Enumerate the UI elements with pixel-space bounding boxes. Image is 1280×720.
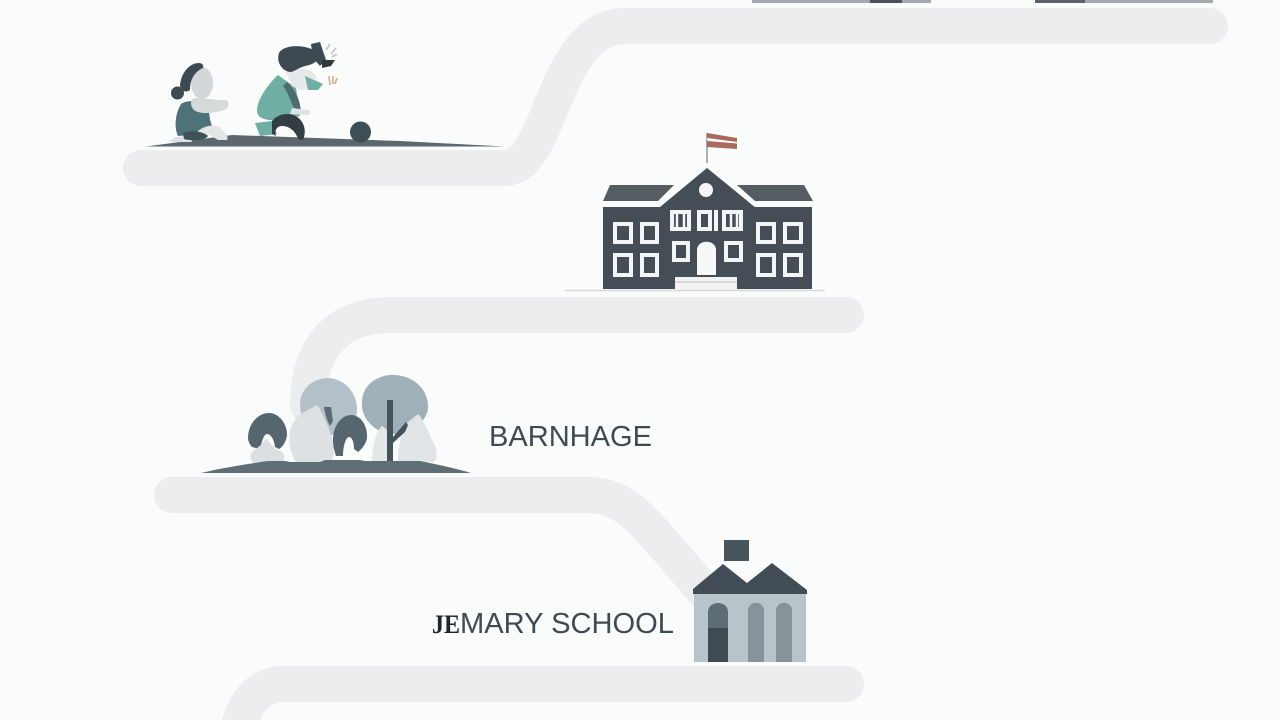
windows [615, 212, 801, 275]
gable round window [699, 183, 713, 197]
gable trim [659, 165, 755, 205]
cropped buildings at top edge [752, 0, 1213, 3]
path segment 1 [141, 26, 1210, 168]
illustration: trees [201, 375, 471, 473]
window mullions [677, 212, 737, 229]
left dark tree [248, 413, 287, 449]
label: Mary School: MARY SCHOOL [460, 608, 674, 640]
kneeling child [255, 42, 337, 140]
roof [693, 563, 807, 594]
roofs [603, 185, 674, 201]
path segment 2 [308, 315, 846, 405]
base line [565, 290, 825, 292]
label: Mary School: JE [432, 610, 460, 639]
center dark tree [333, 415, 367, 456]
pale foreground bushes [289, 405, 334, 462]
arched door [708, 603, 728, 662]
facade [694, 594, 806, 662]
seated child [168, 63, 228, 142]
path segment 4 [238, 684, 846, 720]
right tree canopy [362, 375, 428, 436]
faded back tree [300, 378, 357, 435]
ground under children [146, 135, 505, 146]
small dark trunk accent [324, 407, 333, 426]
chimney block [724, 540, 749, 561]
illustration: school building with flag [565, 133, 825, 290]
ground mound [201, 460, 471, 473]
main body [603, 168, 812, 289]
door [697, 242, 716, 275]
ball [350, 122, 371, 142]
illustration: children playing with ball [146, 42, 505, 146]
illustration: Mary school building [693, 540, 807, 662]
path segment 3 [172, 495, 712, 600]
right tree trunk and branch [387, 400, 393, 462]
label: Barnhage: BARNHAGE [489, 421, 652, 453]
flag [707, 133, 737, 167]
arched window middle [748, 603, 764, 662]
arched window right [776, 603, 792, 662]
steps [675, 277, 737, 289]
